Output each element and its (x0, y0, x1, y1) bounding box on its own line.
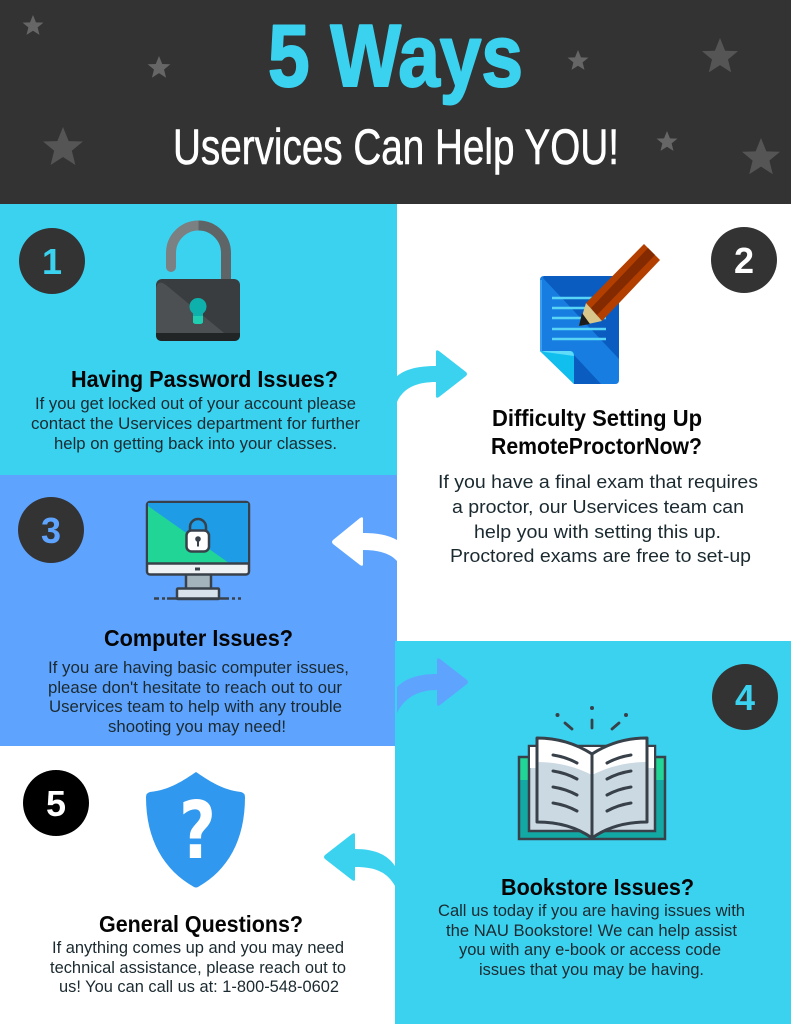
icon: padlock (156, 226, 240, 341)
arrow: step 4 to 5 (324, 833, 395, 886)
text block: issues that you may be having. (479, 960, 704, 979)
icon: shield with question mark: ? (179, 785, 216, 877)
text block: the NAU Bookstore! We can help assist (446, 921, 737, 940)
number badge 2: 2 (734, 240, 754, 281)
text block (48, 658, 349, 736)
panel: step 5 background (0, 746, 395, 1024)
heading: Having Password Issues? (71, 366, 338, 392)
heading (491, 405, 702, 459)
number badge 4 (712, 664, 778, 730)
number badge 1: 1 (42, 241, 62, 282)
arrow: step 2 to 3 (332, 517, 397, 566)
text block: Proctored exams are free to set-up (450, 546, 751, 566)
arrow: step 1 to 2 (396, 350, 467, 402)
text block: If anything comes up and you may need (52, 938, 344, 957)
text block: If you are having basic computer issues, (48, 658, 349, 677)
icon: shield with question mark (146, 772, 245, 888)
text block (50, 938, 346, 996)
panel: step 5 content (23, 770, 346, 996)
panel: step 2 background (397, 204, 791, 641)
text block: If you get locked out of your account please (35, 394, 356, 413)
icon: open book (519, 706, 665, 839)
heading: Difficulty Setting Up (492, 405, 702, 431)
icon: document and pencil (540, 244, 660, 384)
number badge 3 (18, 497, 84, 563)
text block (438, 901, 745, 979)
number badge 1 (19, 228, 85, 294)
icon: monitor with lock (147, 502, 249, 599)
arrow: step 3 to 4 (397, 658, 468, 713)
number badge 2 (711, 227, 777, 293)
panel: step 3 (0, 475, 397, 746)
text block: a proctor, our Uservices team can (452, 497, 744, 517)
heading: General Questions? (99, 911, 303, 937)
text block: help on getting back into your classes. (54, 434, 337, 453)
text block: please don't hesitate to reach out to our (48, 678, 342, 697)
panel: step 4 (395, 641, 791, 1024)
text block: us! You can call us at: 1-800-548-0602 (59, 977, 339, 996)
number badge 3: 3 (41, 510, 61, 551)
heading: Computer Issues? (104, 625, 293, 651)
panel: step 2 content (438, 227, 777, 566)
subtitle: Uservices Can Help YOU! (173, 119, 619, 175)
text block: help you with setting this up. (474, 522, 721, 542)
text block: shooting you may need! (108, 717, 286, 736)
panel: step 1 (0, 204, 397, 475)
heading: RemoteProctorNow? (491, 433, 702, 459)
panel: header (0, 0, 791, 204)
text block: contact the Uservices department for further (31, 414, 360, 433)
number badge 5: 5 (46, 783, 66, 824)
text block: If you have a final exam that requires (438, 472, 758, 492)
text block: Uservices team to help with any trouble (49, 697, 342, 716)
text block: technical assistance, please reach out to (50, 958, 346, 977)
heading: Bookstore Issues? (501, 874, 694, 900)
text block (31, 394, 360, 453)
number badge 4: 4 (735, 677, 755, 718)
title: 5 Ways (268, 6, 523, 105)
number badge 5 (23, 770, 89, 836)
text block (438, 472, 758, 566)
text block: Call us today if you are having issues with (438, 901, 745, 920)
text block: you with any e-book or access code (459, 940, 721, 959)
